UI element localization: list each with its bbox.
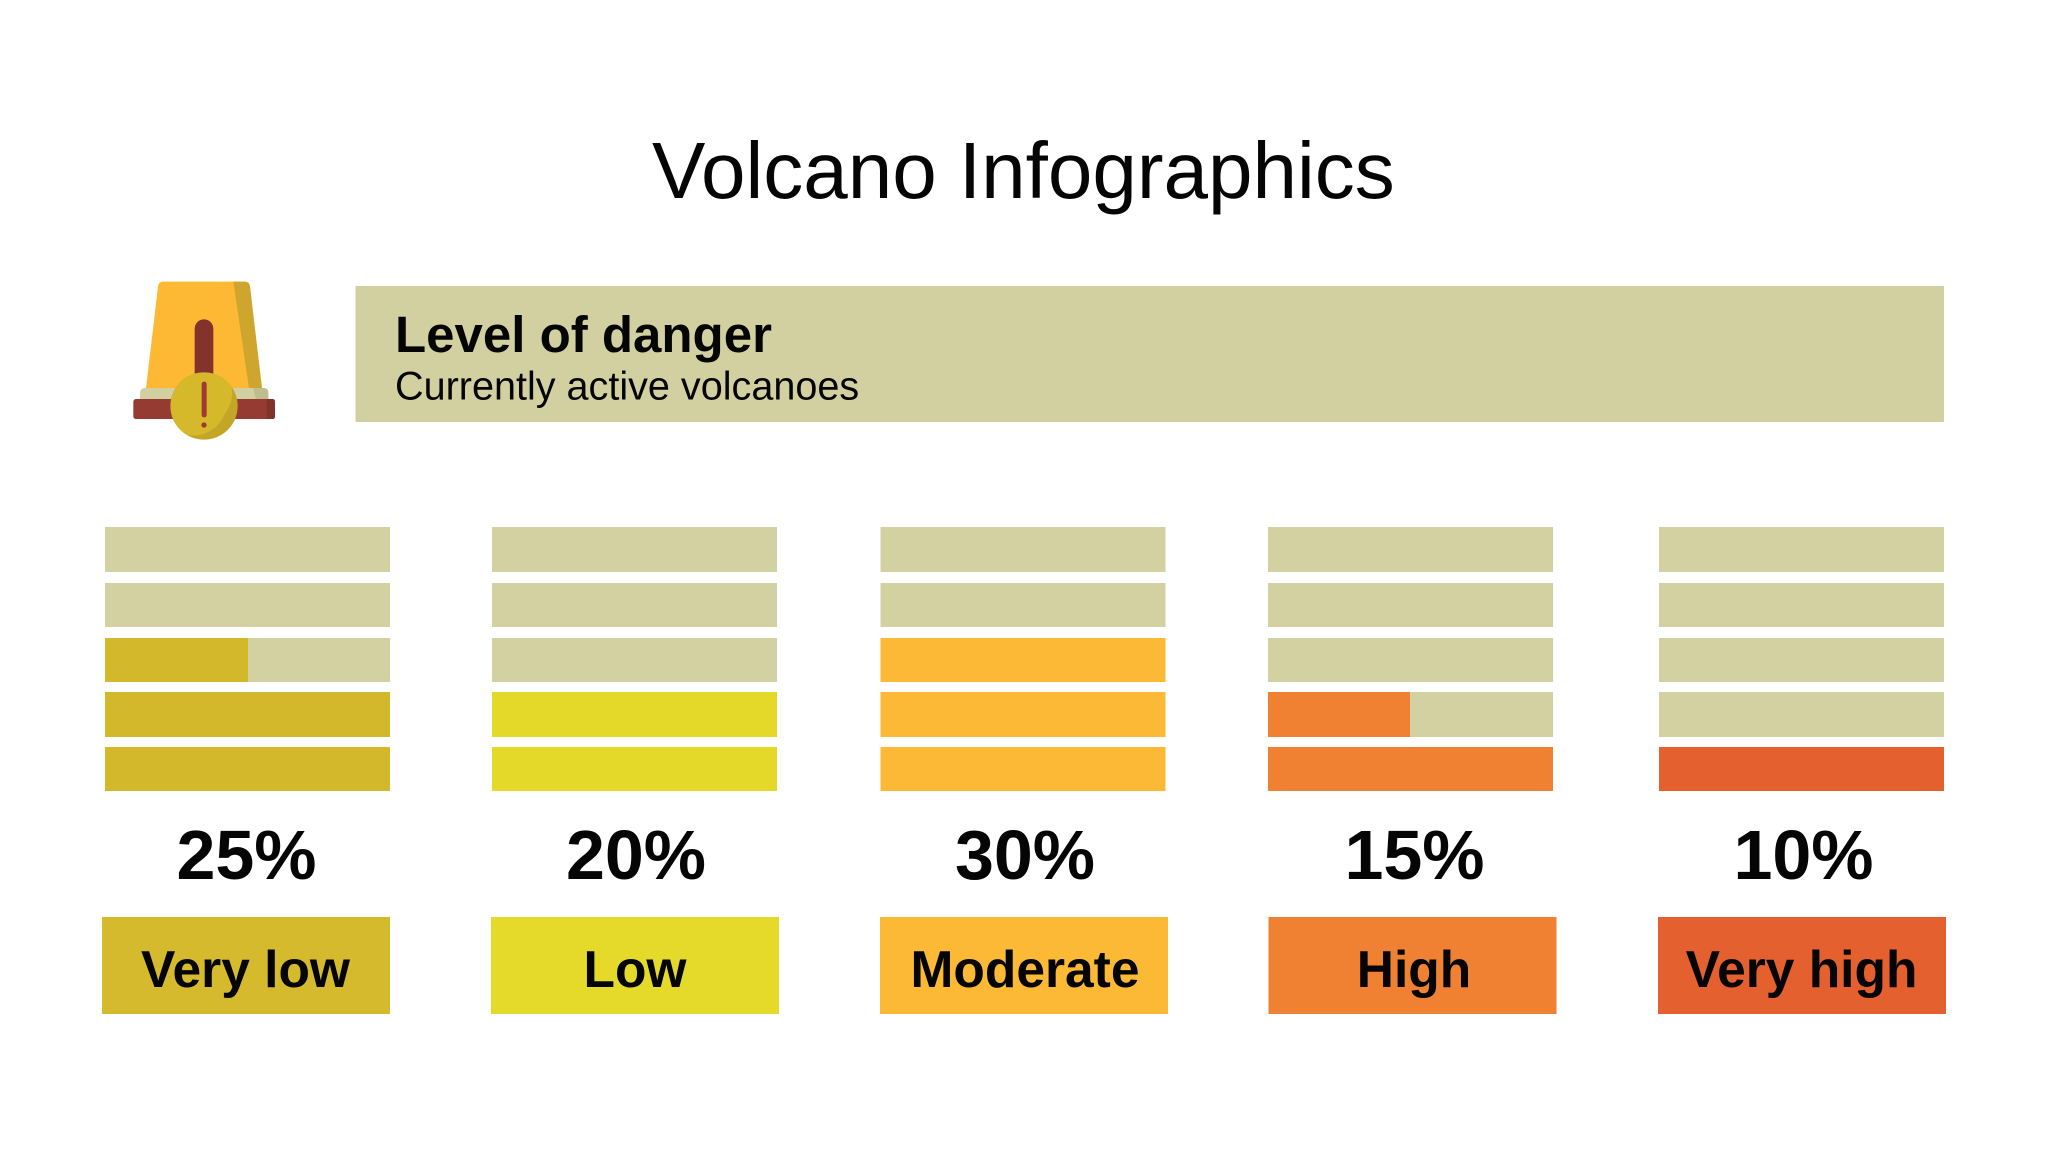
bar stack: high (1268, 527, 1553, 791)
icon: alarm beacon with warning badge (133, 282, 275, 440)
column: low 20% (491, 527, 779, 1014)
label: very low (102, 917, 390, 1014)
percentage: 20%: 20% (566, 816, 706, 894)
panel: level of danger header (356, 286, 1944, 422)
label: very high (1658, 917, 1946, 1014)
percentage: 30%: 30% (955, 816, 1095, 894)
heading: level of danger: Level of danger (395, 306, 772, 363)
bar stack: low (492, 527, 777, 791)
bar stack: very high (1659, 527, 1944, 791)
percentage: 25%: 25% (176, 816, 317, 894)
label: low: Low (584, 940, 687, 998)
label: low (491, 917, 779, 1014)
label: moderate (880, 917, 1168, 1014)
column: very low 25% (102, 527, 390, 1014)
bar stack: very low (105, 527, 390, 791)
bar stack: moderate (880, 527, 1166, 791)
column: very high 10% (1658, 527, 1946, 1014)
label: very low: Very low (141, 940, 351, 998)
column: high 15% (1268, 527, 1556, 1014)
title: Volcano Infographics (652, 126, 1395, 215)
column: moderate 30% (880, 527, 1168, 1014)
subheading: currently active volcanoes: Currently active volcanoes (395, 364, 859, 408)
label: moderate: Moderate (911, 940, 1139, 998)
percentage: 15%: 15% (1344, 816, 1485, 894)
label: high: High (1357, 940, 1471, 998)
percentage: 10%: 10% (1733, 816, 1874, 894)
label: very high: Very high (1686, 940, 1917, 998)
label: high (1268, 917, 1556, 1014)
